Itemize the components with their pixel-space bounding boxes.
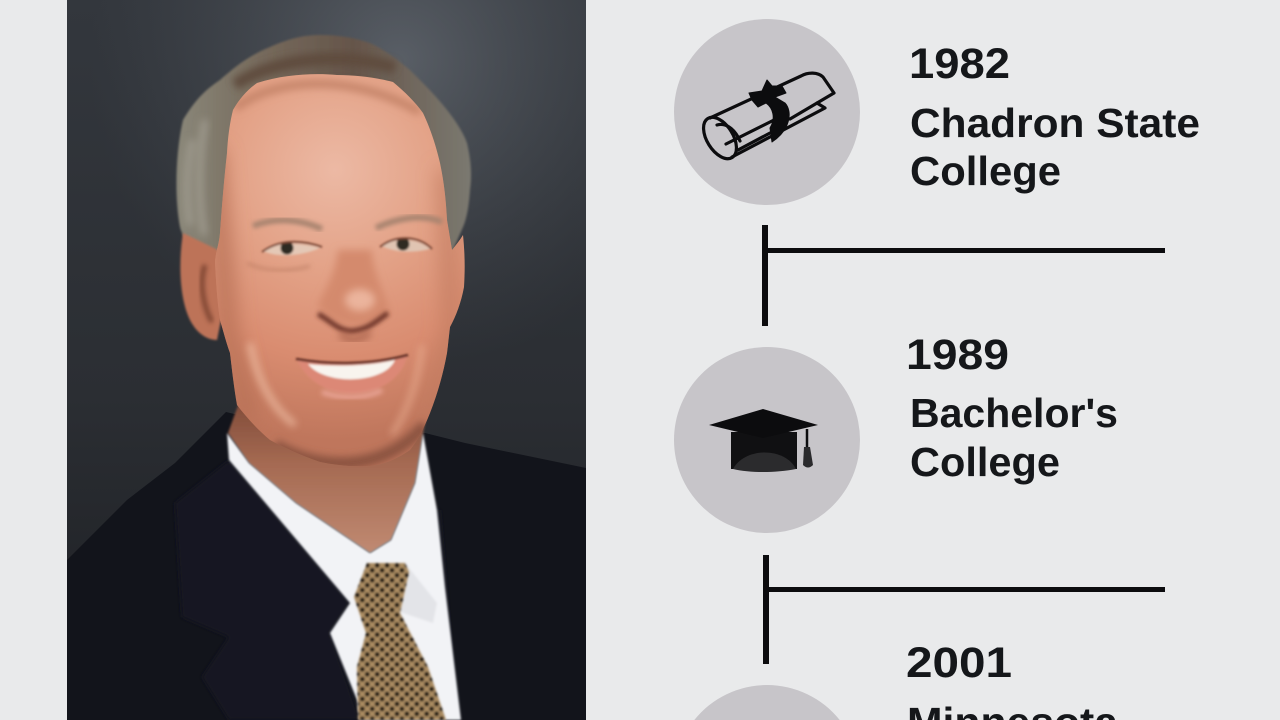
connector 1 [762,225,1165,326]
ribbon bow [749,80,789,142]
label: Bachelor's College [910,390,1118,485]
patterned tie [354,563,446,720]
label: Bachelor's College: Bachelor's [910,390,1118,436]
neck [226,405,427,554]
left eyebrow [253,220,322,229]
left eye [247,242,322,270]
year 1982: 1982 [909,40,1010,88]
icon: rolled diploma [697,73,834,164]
circle: 2001 icon background [694,685,840,720]
right side shading [425,170,452,420]
smile [296,355,408,397]
forehead hairline shading [235,84,420,112]
milestone 1982 [674,19,1200,205]
year 2001: 2001 [906,639,1012,687]
milestone 1989 [674,331,1118,533]
hair [175,34,472,251]
label: Bachelor's College: College [910,439,1060,485]
nose [318,250,390,339]
connector 2 [763,555,1165,664]
icon: graduation cap [709,409,818,472]
chin shadow [275,425,425,463]
portrait photo [67,0,586,720]
ears [180,233,225,340]
left side shading [214,150,250,420]
cheek crease highlights [250,343,295,425]
label: Chadron State College [910,100,1200,194]
face [215,74,465,466]
white shirt and collar [227,433,461,720]
suit jacket [67,412,586,720]
circle: 1989 icon background [674,347,860,533]
year 1989: 1989 [906,331,1009,379]
circle: 1982 icon background [674,19,860,205]
label: Chadron State College: Chadron State [910,100,1200,146]
right eye [380,238,432,252]
label: Chadron State College: College [910,148,1061,194]
right eyebrow [376,218,442,228]
milestone 2001 [694,639,1119,720]
